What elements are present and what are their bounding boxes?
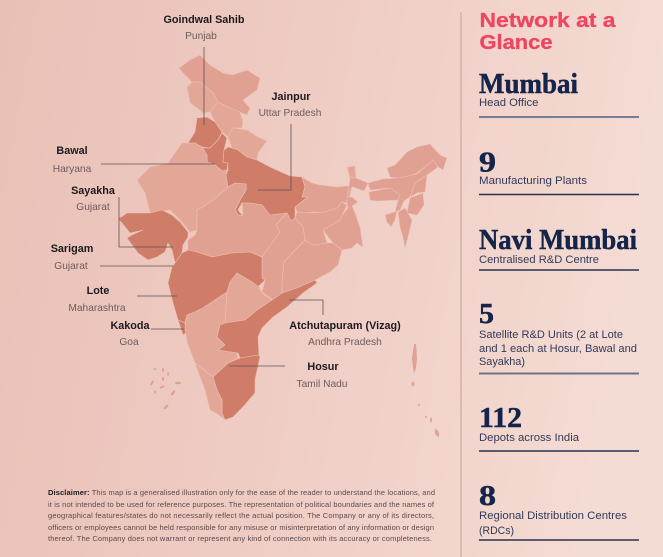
state: Kerala — [195, 363, 225, 420]
disclaimer: it is not intended to be used for reference purposes. The representation of political boundaries and the names of — [48, 500, 435, 509]
callout: Lote: Maharashtra — [68, 303, 126, 314]
callout: Kakoda: Kakoda — [110, 320, 150, 332]
state: Jammu and Kashmir — [179, 55, 260, 115]
callout: Bawal — [53, 145, 215, 175]
Lakshadweep islands — [149, 368, 181, 410]
callout: Sarigam: Sarigam — [51, 243, 93, 255]
state: Goa — [178, 320, 186, 335]
callout: Atchutapuram: Atchutapuram (Vizag) — [289, 320, 401, 332]
stat: 112 depots — [479, 402, 639, 451]
disclaimer — [48, 488, 435, 543]
map of India — [118, 55, 447, 420]
callout: Jainpur — [258, 91, 321, 190]
stat: Mumbai: Head Office — [479, 97, 538, 109]
stat: 5 satellite units: and 1 each at Hosur, Bawal and — [479, 343, 637, 355]
disclaimer: officers or employees cannot be held responsible for any misuse or misinterpretation of any information or design — [48, 523, 434, 532]
stat: 9 plants — [479, 146, 639, 194]
panel: network at a glance — [460, 10, 639, 557]
stat: 5 satellite units: 5 — [479, 298, 494, 330]
stat: Navi Mumbai: Navi Mumbai — [479, 224, 637, 256]
state: Arunachal Pradesh — [387, 144, 447, 178]
state: Uttar Pradesh — [223, 147, 308, 221]
state: Tripura — [385, 211, 397, 227]
callout: Kakoda — [110, 320, 184, 348]
stat: 8 RDCs — [479, 480, 639, 540]
stat: 9 plants: Manufacturing Plants — [479, 175, 587, 187]
stat: Mumbai — [479, 68, 639, 117]
stat: Navi Mumbai: Centralised R&D Centre — [479, 254, 599, 266]
state: Jharkhand — [295, 202, 347, 245]
callout: Lote: Lote — [87, 285, 109, 297]
stat: 5 satellite units — [479, 298, 639, 374]
callout: Atchutapuram — [289, 300, 401, 348]
state: Odisha — [282, 240, 342, 293]
callout: Sayakha — [71, 185, 173, 247]
stat: Mumbai: Mumbai — [479, 68, 578, 100]
stat: 5 satellite units: Sayakha) — [479, 356, 525, 368]
state: Uttarakhand — [228, 128, 267, 160]
state: Assam — [368, 160, 438, 212]
state: Haryana — [202, 133, 228, 171]
disclaimer: Disclaimer: This map is a generalised illustration only for the ease of the reader to understand the locations, and — [48, 488, 435, 497]
state: Maharashtra — [168, 250, 265, 323]
state: Sikkim — [347, 166, 356, 178]
state: Nagaland — [410, 175, 427, 197]
state: Kashmir south — [187, 82, 218, 113]
callout: Sayakha: Sayakha — [71, 185, 116, 197]
callout: Bawal: Bawal — [56, 145, 88, 157]
state: Chhattisgarh — [262, 213, 305, 300]
state: Gujarat — [118, 210, 188, 263]
callout: Atchutapuram: Andhra Pradesh — [308, 337, 382, 348]
disclaimer: geographical features/states do not necessarily reflect the actual position. The Company or any of its directors, — [48, 511, 434, 520]
stat: 8 RDCs: (RDCs) — [479, 525, 514, 537]
callout: Kakoda: Goa — [119, 337, 139, 348]
stat: 5 satellite units: Satellite R&D Units (2 at Lote — [479, 329, 623, 341]
stat: 8 RDCs: Regional Distribution Centres — [479, 510, 627, 522]
stat: 9 plants: 9 — [479, 146, 496, 178]
callout: Sarigam — [51, 243, 173, 272]
heading: Network at a — [480, 10, 616, 32]
callout: Hosur — [229, 361, 347, 390]
state: Tamil Nadu — [213, 355, 260, 420]
callout: Sayakha: Gujarat — [76, 202, 110, 213]
state: Himachal Pradesh — [210, 102, 243, 137]
stat: 112 depots: Depots across India — [479, 432, 580, 444]
state: Andhra Pradesh — [217, 280, 317, 358]
callout: Hosur: Tamil Nadu — [297, 379, 347, 390]
callout: Goindwal Sahib — [164, 14, 245, 125]
stat: 112 depots: 112 — [479, 402, 522, 434]
state: Mizoram — [398, 208, 412, 248]
state: Punjab — [188, 117, 222, 148]
callout: Lote — [68, 285, 177, 314]
state: Madhya Pradesh — [188, 183, 287, 257]
state: Rajasthan — [137, 143, 228, 232]
Andaman and Nicobar islands — [412, 344, 440, 437]
callout: Jainpur: Uttar Pradesh — [259, 108, 321, 119]
state: Meghalaya — [369, 188, 400, 201]
callout: Goindwal Sahib: Goindwal Sahib — [164, 14, 245, 26]
callout: Jainpur: Jainpur — [272, 91, 311, 103]
disclaimer: thereof. The Company does not warrant or represent any kind of connection with its accuracy or completeness. — [48, 534, 432, 543]
state: Manipur — [407, 193, 424, 215]
stat: 8 RDCs: 8 — [479, 480, 496, 512]
stat: Navi Mumbai — [479, 224, 639, 270]
callout: Hosur: Hosur — [307, 361, 339, 373]
state: Karnataka — [185, 292, 238, 377]
callout: Goindwal Sahib: Punjab — [185, 31, 217, 42]
state: West Bengal — [323, 178, 368, 250]
state: Bihar — [295, 177, 352, 213]
heading — [480, 10, 616, 54]
heading: Glance — [480, 32, 552, 54]
callout: Bawal: Haryana — [53, 164, 92, 175]
state: Telangana — [225, 273, 272, 323]
callout: Sarigam: Gujarat — [54, 261, 88, 272]
